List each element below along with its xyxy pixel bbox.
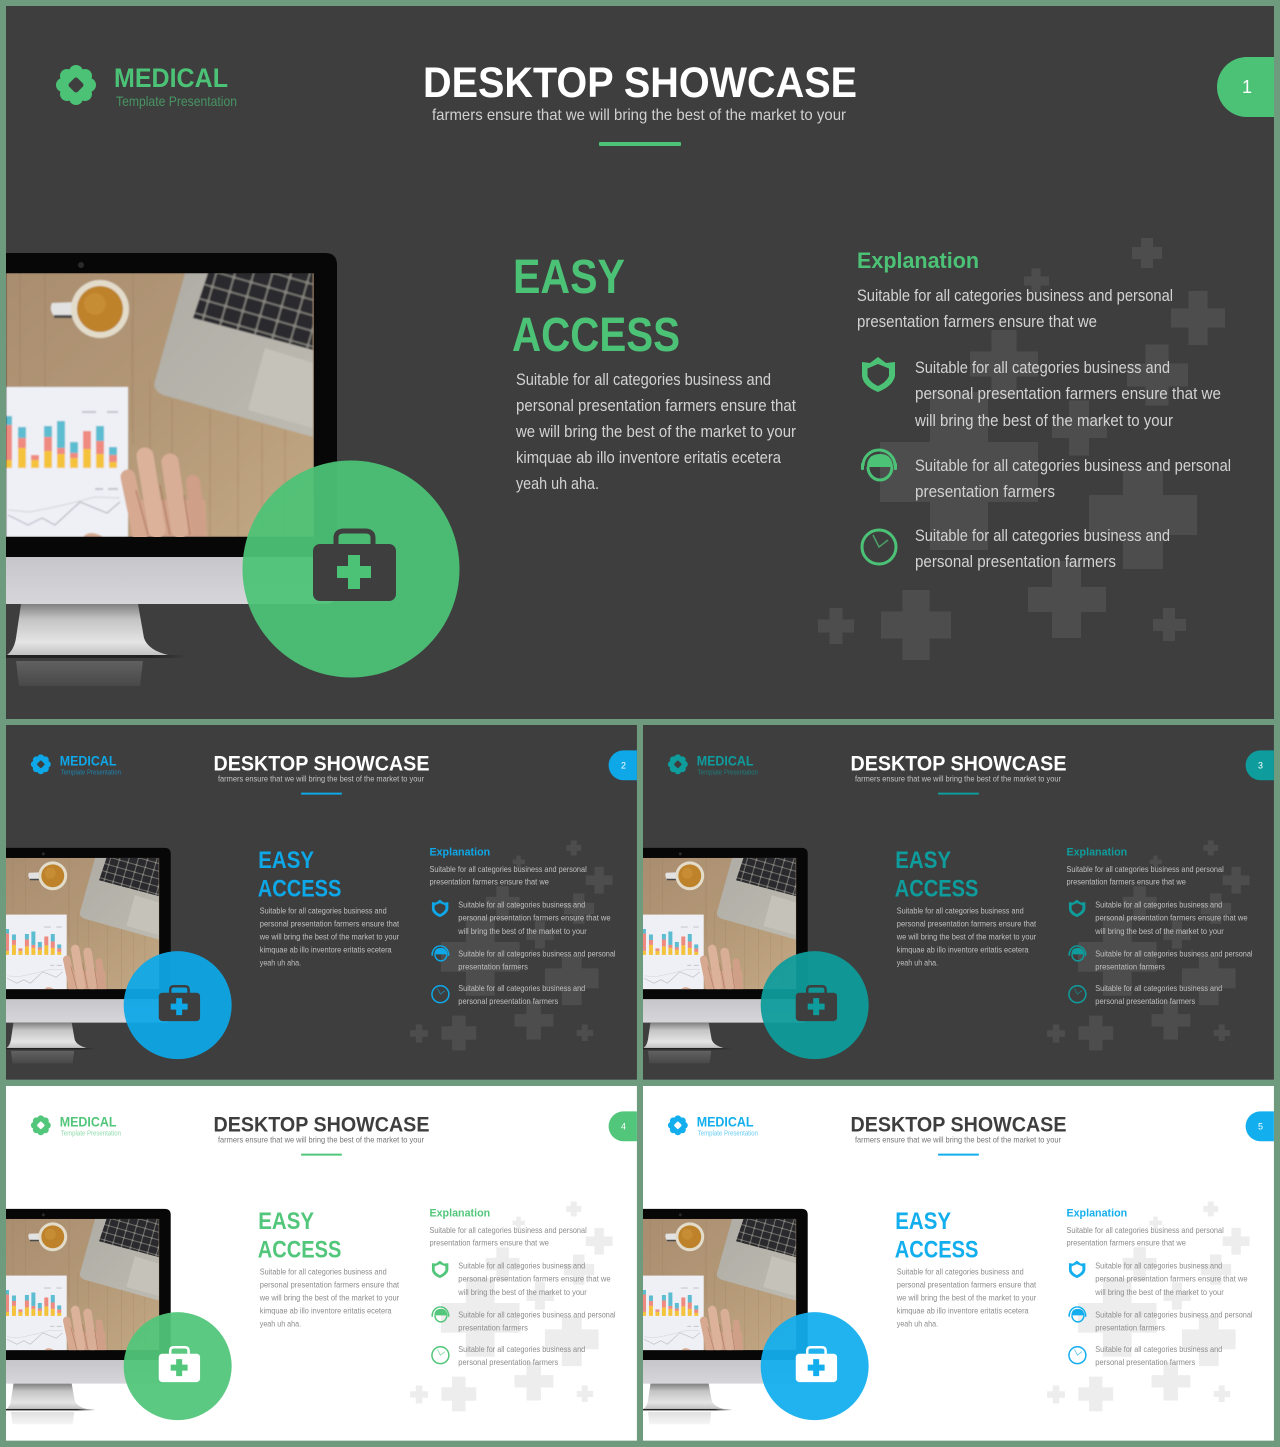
body paragraph: personal presentation farmers ensure that <box>516 397 796 415</box>
icon: headset <box>431 1307 449 1322</box>
feature text one: Suitable for all categories business and <box>1095 901 1223 910</box>
explanation intro text: Suitable for all categories business and personal <box>429 1226 587 1235</box>
feature text one: personal presentation farmers ensure that we <box>458 1275 611 1284</box>
feature text one: will bring the best of the market to your <box>1094 1288 1224 1297</box>
feature text one: will bring the best of the market to your <box>914 412 1173 430</box>
page number tab <box>1217 57 1274 117</box>
body paragraph: Suitable for all categories business and <box>897 1268 1024 1277</box>
body paragraph: yeah uh aha. <box>260 1319 301 1328</box>
body paragraph: we will bring the best of the market to your <box>896 1293 1036 1302</box>
feature text two: presentation farmers <box>458 1323 528 1332</box>
feature text three: Suitable for all categories business and <box>915 527 1170 545</box>
feature text one: personal presentation farmers ensure that we <box>1095 914 1248 923</box>
body paragraph <box>259 1268 400 1328</box>
title underline <box>599 142 681 146</box>
feature text three: personal presentation farmers <box>915 553 1116 571</box>
page number tab: 5 <box>1258 1121 1263 1131</box>
heading: easy access: EASY <box>258 847 314 874</box>
body paragraph: we will bring the best of the market to your <box>259 1293 399 1302</box>
slide background <box>643 725 1274 1080</box>
slide background <box>6 725 637 1080</box>
subtitle: farmers ensure that we will bring the best of the market to your <box>855 775 1061 784</box>
panel: teal dark slide <box>643 725 1274 1080</box>
body paragraph <box>896 1268 1037 1328</box>
feature text one <box>1094 901 1248 936</box>
heading: easy access: EASY <box>513 251 625 304</box>
explanation intro text: presentation farmers ensure that we <box>429 878 549 887</box>
feature text three <box>1095 1345 1223 1367</box>
feature text three <box>915 527 1170 571</box>
icon: clock <box>432 986 449 1003</box>
panel: green light slide <box>6 1086 637 1441</box>
explanation intro text: Suitable for all categories business and personal <box>857 287 1173 305</box>
slide background <box>6 1086 637 1441</box>
subtitle: farmers ensure that we will bring the best of the market to your <box>218 1136 424 1145</box>
feature text three: personal presentation farmers <box>458 997 558 1006</box>
heading: easy access: ACCESS <box>895 876 978 903</box>
feature text three: personal presentation farmers <box>1095 997 1195 1006</box>
feature text three: Suitable for all categories business and <box>458 1345 586 1354</box>
body paragraph: we will bring the best of the market to your <box>515 423 796 441</box>
heading: easy access: EASY <box>895 1208 951 1235</box>
explanation intro text <box>1066 1226 1224 1248</box>
explanation intro text: presentation farmers ensure that we <box>1066 878 1186 887</box>
feature text two: Suitable for all categories business and personal <box>458 1310 616 1319</box>
explanation heading: Explanation <box>1066 846 1127 858</box>
feature text three: Suitable for all categories business and <box>1095 1345 1223 1354</box>
logo tagline: Template Presentation <box>698 770 758 777</box>
body paragraph: we will bring the best of the market to your <box>896 932 1036 941</box>
decorative crosses <box>818 238 1225 660</box>
desktop monitor with photo <box>643 1209 808 1424</box>
body paragraph <box>896 907 1037 967</box>
feature text one: will bring the best of the market to your <box>457 1288 587 1297</box>
body paragraph: personal presentation farmers ensure that <box>897 1281 1037 1290</box>
icon: shield <box>1069 900 1085 917</box>
feature text one: Suitable for all categories business and <box>458 901 586 910</box>
body paragraph: personal presentation farmers ensure that <box>260 1281 400 1290</box>
icon: shield <box>1069 1261 1085 1278</box>
title: DESKTOP SHOWCASE <box>423 59 857 107</box>
decorative crosses <box>1047 1201 1250 1411</box>
body paragraph <box>259 907 400 967</box>
feature text one: will bring the best of the market to your <box>1094 927 1224 936</box>
logo tagline: Template Presentation <box>61 770 121 777</box>
logo name: MEDICAL <box>114 63 228 93</box>
feature text three <box>458 984 586 1006</box>
logo name: MEDICAL <box>697 1114 753 1129</box>
icon: logo flower <box>56 65 96 105</box>
page number tab <box>1246 750 1274 780</box>
icon: medical kit badge <box>761 1312 869 1420</box>
desktop monitor with photo <box>6 848 171 1063</box>
desktop monitor with photo <box>6 1209 171 1424</box>
explanation intro text: presentation farmers ensure that we <box>1066 1239 1186 1248</box>
explanation intro text <box>857 287 1173 331</box>
icon: logo flower <box>668 754 688 774</box>
heading: easy access: EASY <box>895 847 951 874</box>
logo tagline: Template Presentation <box>698 1131 758 1138</box>
heading: easy access <box>895 1208 978 1264</box>
feature text two: presentation farmers <box>458 962 528 971</box>
icon: logo flower <box>31 754 51 774</box>
body paragraph: Suitable for all categories business and <box>897 907 1024 916</box>
feature text one <box>457 901 611 936</box>
icon: clock <box>1069 986 1086 1003</box>
feature text two: Suitable for all categories business and personal <box>915 457 1231 475</box>
body paragraph: Suitable for all categories business and <box>516 371 771 389</box>
desktop monitor with photo <box>6 253 337 686</box>
feature text one <box>1094 1262 1248 1297</box>
explanation heading: Explanation <box>857 248 979 273</box>
icon: medical kit badge <box>242 460 460 678</box>
heading: easy access: ACCESS <box>258 876 341 903</box>
explanation intro text <box>1066 865 1224 887</box>
decorative crosses <box>410 840 613 1050</box>
icon: clock <box>432 1347 449 1364</box>
feature text three: Suitable for all categories business and <box>1095 984 1223 993</box>
heading: easy access: ACCESS <box>512 309 680 362</box>
logo tagline: Template Presentation <box>116 93 237 109</box>
body paragraph: kimquae ab illo inventore eritatis ecetera <box>516 449 782 467</box>
icon: shield <box>432 1261 448 1278</box>
logo name: MEDICAL <box>697 753 753 768</box>
feature text three: Suitable for all categories business and <box>458 984 586 993</box>
page number tab: 3 <box>1258 760 1263 770</box>
feature text two: presentation farmers <box>1095 1323 1165 1332</box>
feature text two <box>458 1310 616 1332</box>
body paragraph: personal presentation farmers ensure that <box>260 920 400 929</box>
feature text two <box>458 949 616 971</box>
icon: medical kit badge <box>761 951 869 1059</box>
body paragraph: kimquae ab illo inventore eritatis ecetera <box>260 1306 392 1315</box>
explanation intro text <box>429 1226 587 1248</box>
icon: logo flower <box>668 1115 688 1135</box>
feature text one: Suitable for all categories business and <box>915 359 1170 377</box>
icon: headset <box>861 450 897 480</box>
icon: headset <box>1068 946 1086 961</box>
body paragraph: yeah uh aha. <box>897 1319 938 1328</box>
heading: easy access: ACCESS <box>895 1237 978 1264</box>
page number tab: 1 <box>1242 77 1252 97</box>
feature text one: Suitable for all categories business and <box>1095 1262 1223 1271</box>
icon: shield <box>432 900 448 917</box>
body paragraph <box>515 371 796 493</box>
page number tab <box>1246 1111 1274 1141</box>
feature text three <box>1095 984 1223 1006</box>
feature text one: Suitable for all categories business and <box>458 1262 586 1271</box>
explanation intro text: Suitable for all categories business and personal <box>429 865 587 874</box>
explanation heading: Explanation <box>429 846 490 858</box>
feature text two: Suitable for all categories business and personal <box>1095 1310 1253 1319</box>
body paragraph: kimquae ab illo inventore eritatis ecetera <box>897 945 1029 954</box>
page number tab: 4 <box>621 1121 626 1131</box>
title: DESKTOP SHOWCASE <box>213 1112 429 1136</box>
title underline <box>301 793 342 795</box>
slide background <box>6 6 1274 719</box>
feature text two: Suitable for all categories business and personal <box>458 949 616 958</box>
feature text two <box>1095 1310 1253 1332</box>
feature text three: personal presentation farmers <box>458 1358 558 1367</box>
panel: blue dark slide <box>6 725 637 1080</box>
panel: blue light slide <box>643 1086 1274 1441</box>
explanation intro text: presentation farmers ensure that we <box>429 1239 549 1248</box>
feature text three <box>458 1345 586 1367</box>
icon: shield <box>862 357 895 392</box>
heading: easy access <box>258 1208 341 1264</box>
body paragraph: personal presentation farmers ensure that <box>897 920 1037 929</box>
icon: logo flower <box>31 1115 51 1135</box>
explanation intro text: presentation farmers ensure that we <box>857 313 1097 331</box>
feature text two <box>1095 949 1253 971</box>
subtitle: farmers ensure that we will bring the best of the market to your <box>218 775 424 784</box>
icon: headset <box>431 946 449 961</box>
heading: easy access <box>513 260 678 352</box>
explanation intro text: Suitable for all categories business and personal <box>1066 1226 1224 1235</box>
body paragraph: we will bring the best of the market to your <box>259 932 399 941</box>
heading: easy access <box>895 847 978 903</box>
feature text two: presentation farmers <box>915 483 1055 501</box>
body paragraph: yeah uh aha. <box>516 475 599 493</box>
body paragraph: kimquae ab illo inventore eritatis ecetera <box>897 1306 1029 1315</box>
feature text two: presentation farmers <box>1095 962 1165 971</box>
title underline <box>938 1154 979 1156</box>
feature text one: personal presentation farmers ensure that we <box>1095 1275 1248 1284</box>
logo name: MEDICAL <box>60 1114 116 1129</box>
feature text one <box>914 359 1221 430</box>
body paragraph: yeah uh aha. <box>260 958 301 967</box>
title underline <box>301 1154 342 1156</box>
icon: clock <box>1069 1347 1086 1364</box>
subtitle: farmers ensure that we will bring the best of the market to your <box>855 1136 1061 1145</box>
title: DESKTOP SHOWCASE <box>213 751 429 775</box>
heading: easy access <box>258 851 341 896</box>
explanation intro text: Suitable for all categories business and personal <box>1066 865 1224 874</box>
page number tab: 2 <box>621 760 626 770</box>
feature text two: Suitable for all categories business and personal <box>1095 949 1253 958</box>
feature text one: personal presentation farmers ensure that we <box>458 914 611 923</box>
feature text three: personal presentation farmers <box>1095 1358 1195 1367</box>
heading: easy access: ACCESS <box>258 1237 341 1264</box>
logo name: MEDICAL <box>60 753 116 768</box>
title: DESKTOP SHOWCASE <box>850 1112 1066 1136</box>
explanation heading: Explanation <box>1066 1207 1127 1219</box>
feature text one: will bring the best of the market to your <box>457 927 587 936</box>
logo tagline: Template Presentation <box>61 1131 121 1138</box>
body paragraph: Suitable for all categories business and <box>260 907 387 916</box>
feature text one <box>457 1262 611 1297</box>
decorative crosses <box>410 1201 613 1411</box>
explanation heading: Explanation <box>429 1207 490 1219</box>
icon: clock <box>862 530 896 564</box>
icon: medical kit badge <box>124 1312 232 1420</box>
desktop monitor with photo <box>643 848 808 1063</box>
decorative crosses <box>1047 840 1250 1050</box>
explanation intro text <box>429 865 587 887</box>
title underline <box>938 793 979 795</box>
heading: easy access: EASY <box>258 1208 314 1235</box>
feature text one: personal presentation farmers ensure that we <box>915 385 1221 403</box>
body paragraph: kimquae ab illo inventore eritatis ecetera <box>260 945 392 954</box>
body paragraph: Suitable for all categories business and <box>260 1268 387 1277</box>
slide background <box>643 1086 1274 1441</box>
icon: headset <box>1068 1307 1086 1322</box>
icon: medical kit badge <box>124 951 232 1059</box>
feature text two <box>915 457 1231 501</box>
panel: main green dark slide <box>6 6 1274 719</box>
title: DESKTOP SHOWCASE <box>850 751 1066 775</box>
body paragraph: yeah uh aha. <box>897 958 938 967</box>
subtitle: farmers ensure that we will bring the best of the market to your <box>432 107 847 124</box>
page number tab <box>609 1111 637 1141</box>
page number tab <box>609 750 637 780</box>
